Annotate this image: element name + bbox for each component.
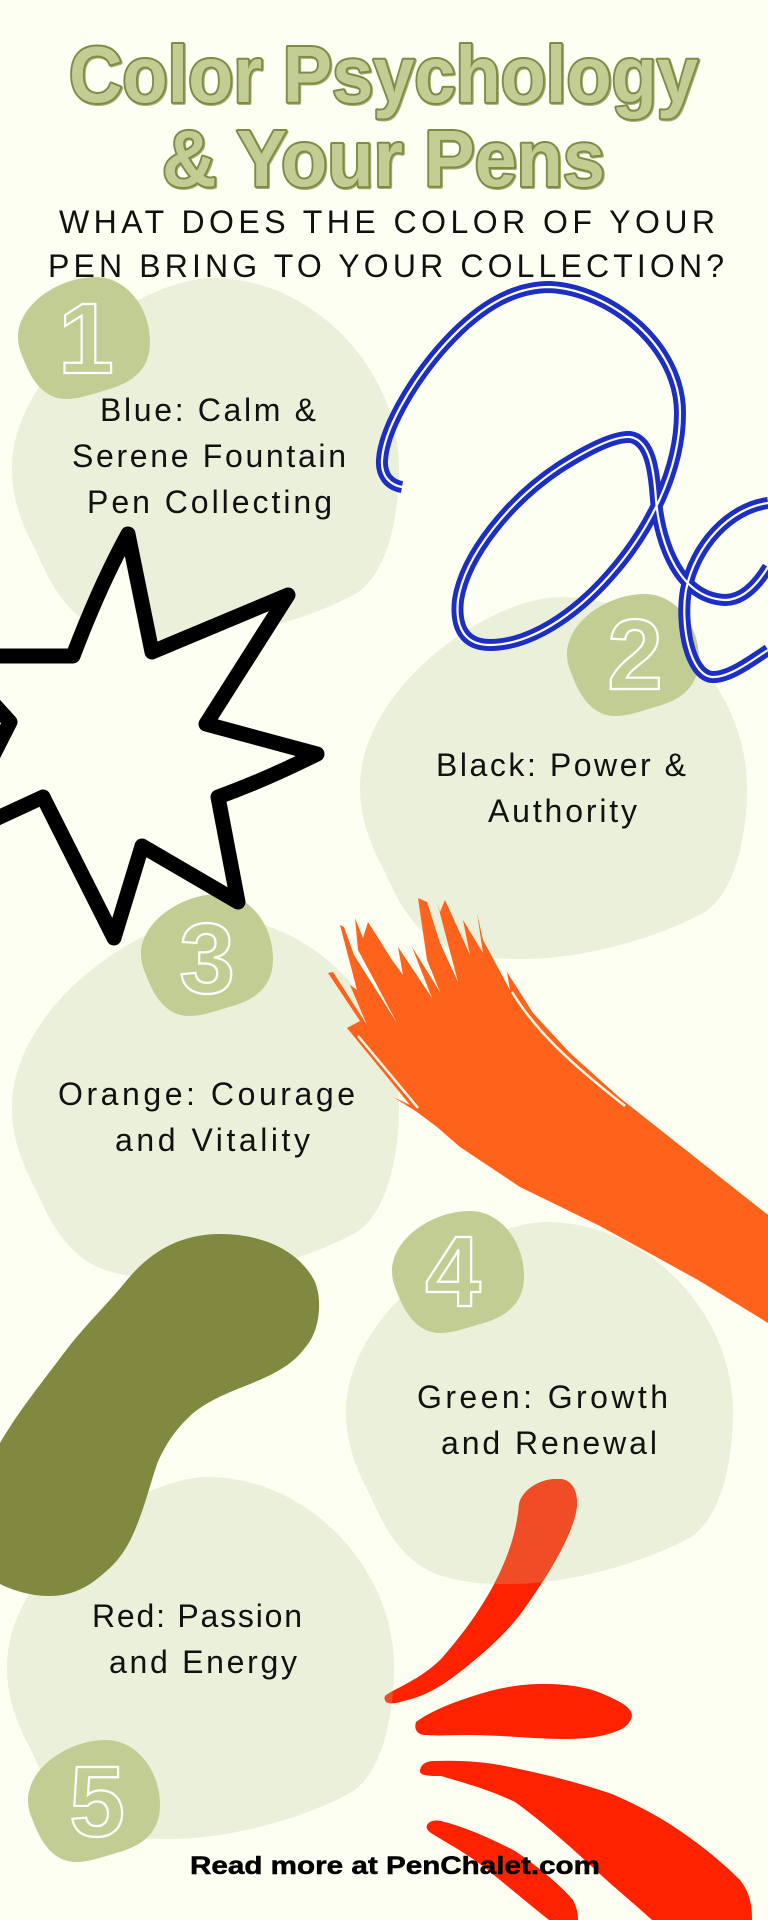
red petal overlap on panel 5 [384,1691,393,1704]
text: blue: Blue: Calm & [100,392,316,428]
subtitle: PEN BRING TO YOUR COLLECTION? [48,248,724,284]
badge 4 [392,1211,524,1333]
title: & Your Pens [162,114,605,203]
text: blue [72,392,346,520]
badge 1: 1 [58,283,114,395]
text: blue: Pen Collecting [87,484,332,520]
red petal: second [415,1684,632,1739]
text: green: and Renewal [441,1425,657,1461]
text: orange: and Vitality [115,1122,310,1158]
badge 3 [141,894,273,1016]
text: blue: Serene Fountain [72,438,346,474]
badge 1 [18,277,150,399]
panel 1: blue [12,277,399,640]
panel 5: red [7,1477,394,1862]
subtitle [48,204,724,284]
badge 5: 5 [69,1746,125,1858]
panel 2: black [360,594,747,959]
red petal: fourth [427,1820,578,1920]
subtitle: WHAT DOES THE COLOR OF YOUR [59,204,715,240]
badge 3: 3 [179,903,235,1015]
text: red: and Energy [109,1644,297,1680]
olive green blob [0,1234,319,1596]
text: orange [58,1076,355,1158]
panel 3: orange [12,894,399,1279]
text: black: Black: Power & [436,747,686,783]
footer text: Read more at PenChalet.com [190,1852,600,1880]
badge 5 [28,1740,160,1862]
panel 4: green [346,1211,733,1584]
text: red [92,1598,302,1680]
text: black [436,747,686,829]
title: Color Psychology [69,30,698,119]
blue pen flourish [382,287,768,677]
text: red: Red: Passion [92,1598,302,1634]
red brush petals [385,1479,752,1920]
text: green: Green: Growth [417,1379,668,1415]
red petal overlap on panel 4 [494,1479,577,1584]
badge 2 [567,594,699,716]
red petal: third [420,1761,752,1920]
text: green [417,1379,668,1461]
orange brush stroke [328,898,768,1323]
title [69,30,698,203]
badge 2: 2 [607,599,663,711]
text: orange: Orange: Courage [58,1076,355,1112]
black star [0,534,317,938]
badge 4: 4 [425,1216,481,1328]
text: black: Authority [488,793,637,829]
red petal: top [385,1479,577,1703]
